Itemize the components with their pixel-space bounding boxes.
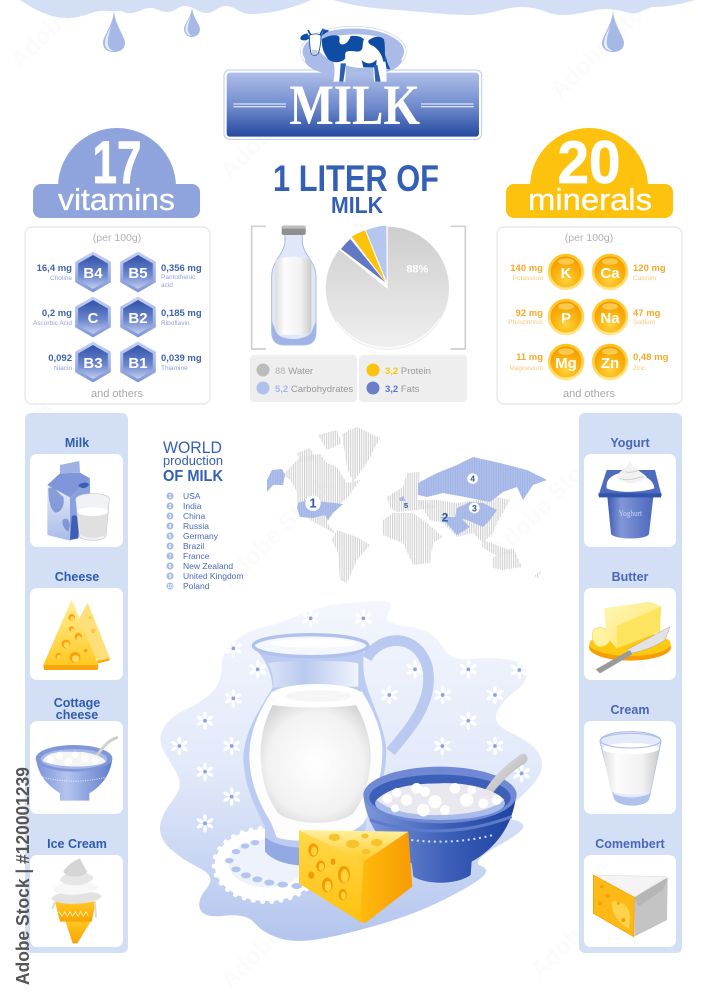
panel: minerals per 100g: P bbox=[561, 310, 571, 327]
splash background bbox=[160, 601, 542, 941]
jug handle bbox=[367, 641, 429, 752]
panel: minerals per 100g: Sodium bbox=[633, 319, 655, 326]
legend: protein and fats bbox=[359, 355, 467, 402]
pie chart: 88% bbox=[406, 263, 429, 275]
ranking list of producing countries: 9 bbox=[169, 574, 172, 580]
panel: minerals per 100g: 120 mg bbox=[633, 263, 666, 274]
panel: vitamins per 100g: Thiamine bbox=[161, 365, 188, 372]
ranking list of producing countries: 7 bbox=[169, 554, 172, 560]
heading badge: 17 vitamins: 17 bbox=[92, 129, 142, 196]
panel: right column of dairy products: Cream bbox=[611, 703, 649, 717]
ranking list of producing countries: France bbox=[183, 551, 210, 561]
panel: minerals per 100g: Calcium bbox=[633, 275, 656, 282]
panel: minerals per 100g: 92 mg bbox=[516, 308, 543, 319]
map rank markers: 5 bbox=[404, 501, 409, 510]
heading badge: 20 minerals: minerals bbox=[528, 182, 652, 217]
panel: left column of dairy products: Milk bbox=[65, 436, 89, 450]
panel: right column of dairy products: Yogurt bbox=[610, 436, 651, 450]
world map bbox=[267, 427, 547, 583]
ranking list of producing countries: 2 bbox=[169, 504, 172, 510]
oval behind cow bbox=[302, 28, 405, 76]
logo: cow above MILK banner bbox=[224, 26, 482, 139]
ranking list of producing countries: Brazil bbox=[183, 541, 204, 551]
panel: minerals per 100g bbox=[497, 227, 682, 404]
panel: vitamins per 100g: C bbox=[88, 310, 99, 327]
stock credit: Adobe Stock | #120001239 bbox=[13, 767, 33, 985]
legend: water and carbohydrates: 5,2 Carbohydrates bbox=[275, 384, 353, 395]
heading: 1 liter of milk: 1 LITER OF bbox=[273, 158, 439, 199]
milk drop left bbox=[103, 9, 125, 52]
decorative lines left of title bbox=[233, 103, 474, 107]
panel: vitamins per 100g: 0,092 bbox=[48, 353, 72, 364]
legend: protein and fats: 3,2 Protein bbox=[385, 366, 431, 377]
ranking list of producing countries: 1 bbox=[169, 494, 172, 500]
icon: glass of cream bbox=[600, 732, 661, 805]
flower pattern bbox=[170, 609, 531, 833]
panel: minerals per 100g: Zn bbox=[601, 355, 619, 372]
legend: protein and fats: 3,2 Fats bbox=[385, 384, 420, 395]
map rank markers: 4 bbox=[470, 474, 475, 484]
panel: vitamins per 100g: Pantothenic bbox=[161, 274, 196, 281]
panel: right column of dairy products bbox=[579, 413, 682, 953]
ranking list of producing countries: New Zealand bbox=[183, 561, 233, 571]
panel: vitamins per 100g: B4 bbox=[83, 265, 103, 282]
ranking list of producing countries: 4 bbox=[169, 524, 172, 530]
panel: minerals per 100g: K bbox=[561, 265, 572, 282]
map rank markers: 1 bbox=[309, 497, 317, 511]
ranking list of producing countries: United Kingdom bbox=[183, 571, 243, 581]
world production heading: production bbox=[163, 453, 223, 468]
panel: vitamins per 100g: B5 bbox=[128, 265, 148, 282]
panel: vitamins per 100g: Choline bbox=[50, 275, 72, 282]
icon: comembert wedge bbox=[593, 875, 668, 937]
milk composition chart bbox=[252, 226, 465, 350]
ranking list of producing countries: 10 bbox=[167, 584, 173, 590]
panel: left column of dairy products: Ice Cream bbox=[47, 837, 107, 851]
ranking list of producing countries: Russia bbox=[183, 521, 209, 531]
world production heading: WORLD bbox=[163, 438, 222, 457]
icon: butter on plate with knife bbox=[589, 602, 671, 673]
panel: minerals per 100g: Phosphorus bbox=[508, 319, 544, 326]
milk drop middle bbox=[184, 6, 200, 37]
panel: vitamins per 100g bbox=[25, 227, 210, 404]
map rank markers: 3 bbox=[472, 503, 477, 513]
panel: vitamins per 100g: B2 bbox=[128, 310, 148, 327]
panel: minerals per 100g: and others bbox=[563, 388, 615, 400]
panel: left column of dairy products: Cheese bbox=[55, 570, 99, 584]
panel: vitamins per 100g: 0,185 mg bbox=[161, 308, 202, 319]
panel: vitamins per 100g: Ascorbic Acid bbox=[33, 320, 72, 327]
panel: minerals per 100g: Zinc bbox=[633, 365, 646, 372]
panel: vitamins per 100g: acid bbox=[161, 282, 173, 289]
heading badge: 20 minerals bbox=[506, 128, 673, 218]
panel: vitamins per 100g: B3 bbox=[83, 355, 103, 372]
world production heading bbox=[163, 438, 223, 485]
panel: vitamins per 100g: Riboflavin bbox=[161, 320, 190, 327]
panel: right column of dairy products: Butter bbox=[612, 570, 649, 584]
ranking list of producing countries bbox=[166, 491, 243, 591]
panel: minerals per 100g: 140 mg bbox=[510, 263, 543, 274]
icon: cheese wedges bbox=[43, 599, 110, 670]
panel: minerals per 100g: Ca bbox=[600, 265, 620, 282]
legend: water and carbohydrates bbox=[250, 355, 357, 402]
heading: 1 liter of milk: MILK bbox=[331, 192, 383, 218]
ranking list of producing countries: India bbox=[183, 501, 202, 511]
panel: vitamins per 100g: 16,4 mg bbox=[37, 263, 72, 274]
map rank markers bbox=[305, 473, 480, 525]
icon: cottage cheese bowl bbox=[36, 738, 117, 801]
heading badge: 20 minerals: 20 bbox=[558, 129, 620, 196]
panel: vitamins per 100g: B1 bbox=[128, 355, 148, 372]
panel: vitamins per 100g: 0,2 mg bbox=[42, 308, 72, 319]
ranking list of producing countries: China bbox=[183, 511, 205, 521]
panel: vitamins per 100g: 0,039 mg bbox=[161, 353, 202, 364]
highlighted producers bbox=[267, 457, 547, 535]
milk drop right bbox=[602, 9, 624, 52]
icon: milk carton and glass bbox=[47, 461, 109, 541]
ranking list of producing countries: 8 bbox=[169, 564, 172, 570]
swiss cheese wedge bbox=[299, 830, 412, 923]
panel: left column of dairy products: cheese bbox=[56, 708, 98, 722]
heading badge: 17 vitamins: vitamins bbox=[58, 182, 175, 217]
heading badge: 17 vitamins bbox=[33, 128, 200, 218]
icon: yogurt cup: Yoghurt bbox=[619, 509, 643, 518]
ranking list of producing countries: USA bbox=[183, 491, 201, 501]
icon: milk bottle bbox=[272, 226, 316, 345]
panel: vitamins per 100g: 0,356 mg bbox=[161, 263, 202, 274]
panel: minerals per 100g: Na bbox=[600, 310, 620, 327]
heading: 1 liter of milk bbox=[273, 158, 439, 218]
panel: minerals per 100g: 11 mg bbox=[516, 352, 543, 363]
ranking list of producing countries: 3 bbox=[169, 514, 172, 520]
panel: minerals per 100g: Potassium bbox=[513, 275, 543, 282]
ranking list of producing countries: Germany bbox=[183, 531, 219, 541]
ranking list of producing countries: 5 bbox=[169, 534, 172, 540]
panel: minerals per 100g: 0,48 mg bbox=[633, 352, 669, 363]
panel: minerals per 100g: (per 100g) bbox=[565, 232, 613, 244]
milk drips along the top edge bbox=[20, 0, 695, 52]
panel: minerals per 100g: Magnesium bbox=[509, 365, 543, 372]
world production heading: OF MILK bbox=[163, 468, 223, 485]
map rank markers: 2 bbox=[442, 511, 449, 525]
panel: minerals per 100g: 47 mg bbox=[633, 308, 661, 319]
lace doily bbox=[214, 828, 319, 902]
panel: right column of dairy products: Comembert bbox=[595, 837, 666, 851]
icon: yogurt cup bbox=[598, 462, 662, 538]
panel: minerals per 100g: Mg bbox=[555, 355, 577, 372]
cow bbox=[300, 29, 390, 82]
panel: vitamins per 100g: (per 100g) bbox=[93, 232, 141, 244]
pie chart bbox=[325, 226, 449, 350]
panel: vitamins per 100g: and others bbox=[91, 388, 143, 400]
glass jug body bbox=[243, 635, 386, 866]
panel: vitamins per 100g: Niacin bbox=[54, 365, 72, 372]
hero illustration: dairy still life bbox=[160, 601, 542, 941]
continents striped bbox=[283, 427, 542, 583]
ranking list of producing countries: Poland bbox=[183, 581, 210, 591]
legend: water and carbohydrates: 88 Water bbox=[275, 366, 313, 377]
cottage cheese bowl bbox=[363, 754, 527, 883]
title MILK: MILK bbox=[289, 75, 420, 137]
panel: left column of dairy products: Cottage bbox=[54, 696, 100, 710]
icon: soft ice cream cone bbox=[52, 859, 102, 943]
panel: left column of dairy products bbox=[25, 413, 128, 953]
banner plate bbox=[224, 70, 482, 139]
ranking list of producing countries: 6 bbox=[169, 544, 172, 550]
